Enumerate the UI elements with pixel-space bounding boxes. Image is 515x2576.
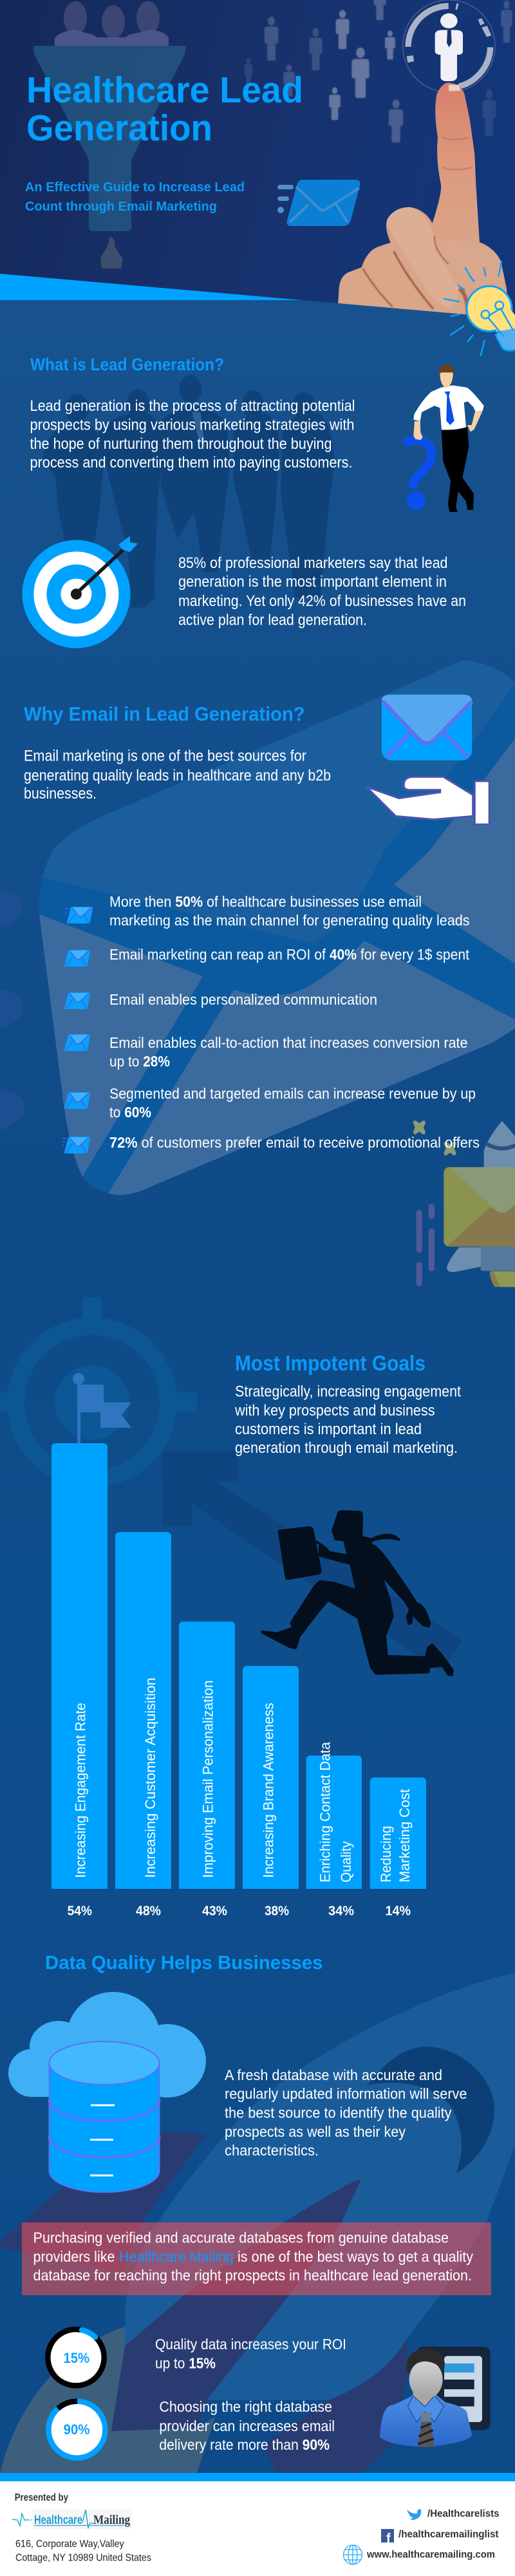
heading: most important goals: Most Impotent Goals — [235, 1351, 426, 1375]
text block: goals: Strategically, increasing engagement — [235, 1383, 461, 1400]
heading: why email: Why Email in Lead Generation? — [24, 703, 305, 725]
list: email statistics — [62, 893, 480, 1153]
text block: goals — [234, 1383, 461, 1457]
text block: 85 percent: 85% of professional marketers say that lead — [178, 554, 448, 572]
logo: Mailing — [93, 2513, 130, 2527]
callout: purchasing verified databases: is one of the best ways to get a quality — [238, 2248, 473, 2265]
text block: fresh database: regularly updated information will serve — [225, 2085, 467, 2102]
footer accent bar — [0, 2473, 515, 2481]
bullet text 6: 72% of customers prefer email to receive promotional offers — [109, 1134, 480, 1151]
bar values: 14% — [385, 1904, 411, 1918]
address: Cottage, NY 10989 United States — [15, 2553, 151, 2564]
callout: purchasing verified databases: Healthcare Mailing — [119, 2248, 234, 2265]
icon: flag — [73, 1373, 131, 1443]
icon: twitter — [407, 2509, 421, 2520]
icon: running businessman silhouette — [261, 1510, 454, 1676]
bullet text 2: Email marketing can reap an ROI of 40% for every 1$ spent — [109, 946, 470, 963]
background arrow — [163, 1451, 463, 1672]
text block: definition: process and converting them into paying customers. — [30, 454, 353, 471]
text block: definition: the hope of nurturing them throughout the buying — [30, 435, 332, 453]
background blob shape: paper plane — [0, 660, 515, 1195]
text block: fresh database — [225, 2067, 467, 2159]
bar labels: Improving Email Personalization — [200, 1680, 216, 1878]
icon: target with arrow — [22, 536, 138, 648]
text block: 85 percent: generation is the most important element in — [178, 573, 447, 591]
text block: fresh database: characteristics. — [225, 2142, 319, 2159]
text block: why email: Email marketing is one of the best sources for — [24, 748, 306, 765]
website: www.healthcaremailing.com — [366, 2550, 495, 2561]
text block: definition: Lead generation is the process of attracting potential — [30, 397, 355, 415]
text block: fresh database: A fresh database with accurate and — [225, 2067, 442, 2083]
bar labels: Increasing Brand Awareness — [260, 1703, 277, 1878]
heading: what is lead generation: What is Lead Generation? — [30, 355, 224, 374]
icon: person with document — [380, 2347, 491, 2447]
icon: businessman with question mark — [404, 365, 484, 512]
silhouettes of business people — [42, 375, 334, 607]
bar labels: Enriching Contact Data — [317, 1741, 333, 1882]
stat ring: 90 percent: 90% — [63, 2421, 90, 2438]
stat ring: 90 percent — [48, 2401, 105, 2458]
text block: fresh database: the best source to identify the quality — [225, 2105, 452, 2121]
text block: fresh database: prospects as well as their key — [225, 2123, 406, 2140]
bars — [52, 1443, 426, 1889]
bar labels: Increasing Customer Acquisition — [142, 1678, 158, 1878]
bar labels: Increasing Engagement Rate — [72, 1703, 89, 1878]
text block: right database provider: Choosing the right database — [159, 2398, 332, 2415]
bar values: 38% — [265, 1904, 289, 1918]
text block: why email: businesses. — [24, 785, 97, 802]
icon: flying email — [277, 180, 360, 226]
stat ring: 15 percent: 15% — [63, 2350, 89, 2366]
bullet text 5 — [109, 1085, 476, 1121]
icon: mail bullet 3 — [62, 992, 90, 1009]
icon: facebook — [381, 2529, 394, 2546]
icon: globe — [344, 2545, 362, 2564]
bar values: 43% — [202, 1904, 227, 1918]
background shapes: data section — [0, 1973, 515, 2473]
text block: 85 percent — [178, 554, 466, 629]
text block: definition: prospects by using various marketing strategies with — [30, 416, 354, 434]
bullet text 4 — [109, 1034, 467, 1070]
twitter handle: /Healthcarelists — [427, 2508, 500, 2519]
callout: purchasing verified databases: Purchasing verified and accurate databases from genuine database — [33, 2230, 449, 2246]
text block: 85 percent: marketing. Yet only 42% of businesses have an — [178, 592, 466, 610]
title: Healthcare Lead — [26, 70, 303, 111]
icon: mail bullet 4 — [62, 1034, 90, 1051]
icon: mail bullet 1 — [64, 907, 93, 923]
address: 616, Corporate Way,Valley — [15, 2539, 124, 2550]
bar labels: Quality — [338, 1841, 354, 1882]
facebook handle: /healthcaremailinglist — [398, 2529, 498, 2540]
callout: purchasing verified databases: database for reaching the right prospects in healthcare lead generation. — [33, 2267, 472, 2284]
icon: mail bullet 5 — [62, 1092, 90, 1109]
subtitle: An Effective Guide to Increase Lead — [25, 180, 245, 194]
bullet text 4: Email enables call-to-action that increases conversion rate — [109, 1034, 467, 1051]
bar values: 48% — [136, 1904, 161, 1918]
bar chart: goals — [52, 1443, 426, 1918]
header accent wedge — [0, 274, 309, 301]
footer panel — [0, 2481, 515, 2576]
bullet text 3: Email enables personalized communication — [109, 991, 377, 1008]
text block: right database provider: delivery rate more than 90% — [159, 2436, 330, 2453]
bullet text 1: More then 50% of healthcare businesses use email — [109, 893, 422, 910]
logo: Healthcare — [34, 2514, 82, 2527]
callout: purchasing verified databases: providers like — [33, 2248, 115, 2265]
bar values: 54% — [68, 1904, 92, 1918]
bullet text 1 — [109, 893, 470, 929]
text block: goals: customers is important in lead — [235, 1421, 422, 1438]
text block: goals: with key prospects and business — [234, 1402, 435, 1419]
text block: quality data — [155, 2336, 346, 2372]
icon: hand holding email — [366, 695, 489, 824]
text block: 85 percent: active plan for lead generation. — [178, 612, 367, 629]
text block: why email — [24, 748, 331, 802]
bar values — [68, 1904, 411, 1918]
presented by: Presented by — [15, 2492, 68, 2503]
header background — [0, 0, 515, 322]
photo: finger pointing at person icon — [337, 0, 510, 322]
bullet text 5: Segmented and targeted emails can increase revenue by up — [109, 1085, 476, 1102]
bullet text 1: marketing as the main channel for generating quality leads — [109, 912, 470, 929]
icon: cloud database — [8, 1992, 206, 2192]
text block: definition — [30, 397, 355, 471]
bar values: 34% — [328, 1904, 354, 1918]
subtitle: Count through Email Marketing — [25, 200, 217, 214]
text block: quality data: Quality data increases your ROI — [155, 2336, 346, 2353]
icon: facebook: f — [386, 2532, 391, 2546]
address — [15, 2539, 151, 2564]
bullet text 5: to 60% — [109, 1104, 151, 1121]
bar labels: Marketing Cost — [397, 1789, 413, 1882]
logo — [12, 2510, 132, 2529]
text block: right database provider: provider can increases email — [159, 2418, 335, 2434]
subtitle — [25, 180, 245, 214]
background target graphic — [0, 1297, 197, 1488]
heading: data quality: Data Quality Helps Businesses — [45, 1953, 323, 1973]
icon: mail bullet 2 — [62, 950, 90, 967]
callout: purchasing verified databases — [22, 2222, 491, 2295]
background audience figures — [245, 0, 512, 142]
icon: light bulb — [444, 261, 515, 355]
icon: mail bullet 6 — [62, 1137, 90, 1153]
bar labels: Reducing — [378, 1826, 394, 1882]
stat ring: 15 percent — [48, 2329, 104, 2385]
bullet text 4: up to 28% — [109, 1053, 170, 1070]
title — [26, 70, 303, 149]
funnel illustration — [33, 1, 186, 269]
text block: quality data: up to 15% — [155, 2355, 216, 2372]
title: Generation — [26, 108, 212, 149]
text block: goals: generation through email marketing. — [235, 1439, 458, 1457]
text block: right database provider — [159, 2398, 335, 2453]
bar labels — [72, 1678, 413, 1882]
decorative rocket with envelope — [413, 1121, 515, 1287]
text block: why email: generating quality leads in healthcare and any b2b — [24, 767, 331, 784]
